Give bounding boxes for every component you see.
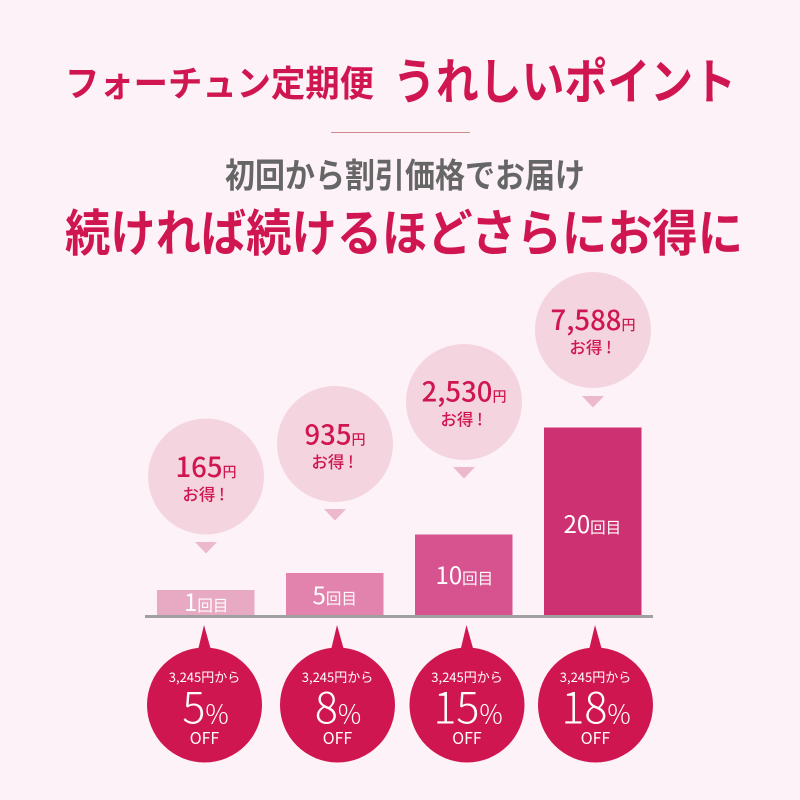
discount badge: 5% OFF: 5% xyxy=(182,674,229,736)
discount badge: 15% OFF: 3,245円から xyxy=(431,667,503,686)
baseline xyxy=(145,615,653,618)
savings bubble: 2,530円 xyxy=(406,344,522,478)
savings bubble: 2,530円: お得 ! xyxy=(440,406,483,430)
savings bubble: 935円 xyxy=(277,386,393,520)
discount badge: 8% OFF xyxy=(280,625,395,762)
bar: 20回目: 20回目 xyxy=(564,505,621,540)
title: フォーチュン定期便 xyxy=(65,55,374,107)
bar: 10回目 xyxy=(415,534,512,616)
discount badge: 8% OFF: 3,245円から xyxy=(302,667,373,686)
savings bubble: 7,588円: 7,588円 xyxy=(551,298,635,338)
discount badge: 5% OFF xyxy=(147,625,262,762)
discount badge: 15% OFF: 15% xyxy=(433,674,503,736)
savings bubble: 7,588円: お得 ! xyxy=(569,334,612,358)
bar: 5回目: 5回目 xyxy=(312,576,357,611)
savings bubble: 165円: お得 ! xyxy=(182,482,225,506)
discount badge: 18% OFF: 18% xyxy=(561,674,631,736)
main heading: 続ければ続けるほどさらにお得に xyxy=(65,194,743,266)
bar: 1回目 xyxy=(157,583,254,618)
bar: 10回目: 10回目 xyxy=(436,556,493,591)
savings bubble: 935円: お得 ! xyxy=(311,449,354,473)
savings bubble: 7,588円 xyxy=(535,272,651,408)
bar: 20回目 xyxy=(544,428,642,616)
discount badge: 15% OFF xyxy=(410,625,524,762)
discount badge: 18% OFF: OFF xyxy=(581,725,610,749)
bar: 5回目 xyxy=(286,573,384,616)
savings bubble: 2,530円: 2,530円 xyxy=(422,370,506,410)
discount badge: 15% OFF: OFF xyxy=(452,725,482,749)
savings bubble: 165円: 165円 xyxy=(175,445,237,485)
discount badge: 5% OFF: 3,245円から xyxy=(169,667,240,686)
savings bubble: 935円: 935円 xyxy=(304,412,366,452)
discount badge: 8% OFF: OFF xyxy=(323,725,352,749)
discount badge: 5% OFF: OFF xyxy=(190,725,219,749)
savings bubble: 165円 xyxy=(148,418,264,554)
title xyxy=(65,43,736,114)
title: うれしいポイント xyxy=(393,43,736,114)
subheading: 初回から割引価格でお届け xyxy=(225,148,585,198)
discount badge: 8% OFF: 8% xyxy=(315,674,361,736)
bar chart xyxy=(145,428,653,618)
bar: 1回目: 1回目 xyxy=(184,583,228,618)
discount badge: 18% OFF xyxy=(538,625,653,762)
discount badge: 18% OFF: 3,245円から xyxy=(560,667,631,686)
